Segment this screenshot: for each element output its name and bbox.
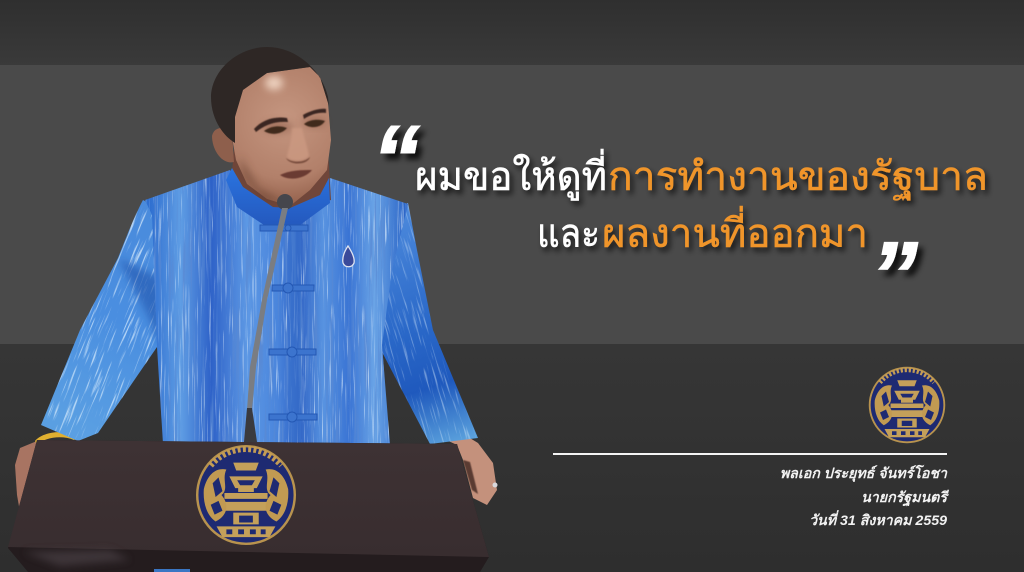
eyes — [264, 120, 325, 134]
quote line 2: และ — [537, 212, 600, 256]
face — [233, 67, 331, 206]
quote line 1 — [415, 149, 988, 201]
podium seal — [196, 445, 296, 545]
quote line 1: ผมขอให้ดูที่ — [415, 149, 607, 200]
microphone — [244, 194, 293, 442]
neck — [232, 150, 331, 212]
nose — [286, 128, 310, 164]
quote line 1: การทำงานของรัฐบาล — [608, 155, 988, 201]
jacket left sleeve — [0, 153, 259, 488]
hair — [211, 47, 329, 143]
lapel pin — [343, 246, 354, 267]
yellow wristband — [35, 432, 78, 445]
quote line 2: ผลงานที่ออกมา — [602, 206, 868, 256]
facial shading — [240, 76, 326, 203]
right hand — [440, 432, 498, 505]
top band — [0, 0, 1024, 66]
opening quotation mark: “ — [372, 106, 420, 213]
caption: นายกรัฐมนตรี — [861, 489, 950, 507]
closing quotation mark: ” — [870, 222, 918, 329]
eyebrows — [254, 109, 326, 132]
caption — [780, 464, 950, 529]
jacket right sleeve — [308, 175, 542, 472]
mouth — [280, 170, 312, 179]
caption: พลเอก ประยุทธ์ จันทร์โอชา — [780, 464, 948, 482]
divider — [553, 453, 947, 455]
podium — [8, 440, 489, 572]
middle band — [0, 65, 1024, 344]
government seal — [869, 367, 945, 443]
left hand — [15, 441, 38, 512]
ear — [212, 128, 234, 162]
jacket torso — [145, 170, 408, 444]
chest button loops — [260, 225, 317, 422]
portrait of speaker at podium — [0, 47, 542, 572]
jacket collar — [226, 168, 330, 227]
bottom band — [0, 344, 1024, 572]
caption: วันที่ 31 สิงหาคม 2559 — [809, 510, 947, 529]
